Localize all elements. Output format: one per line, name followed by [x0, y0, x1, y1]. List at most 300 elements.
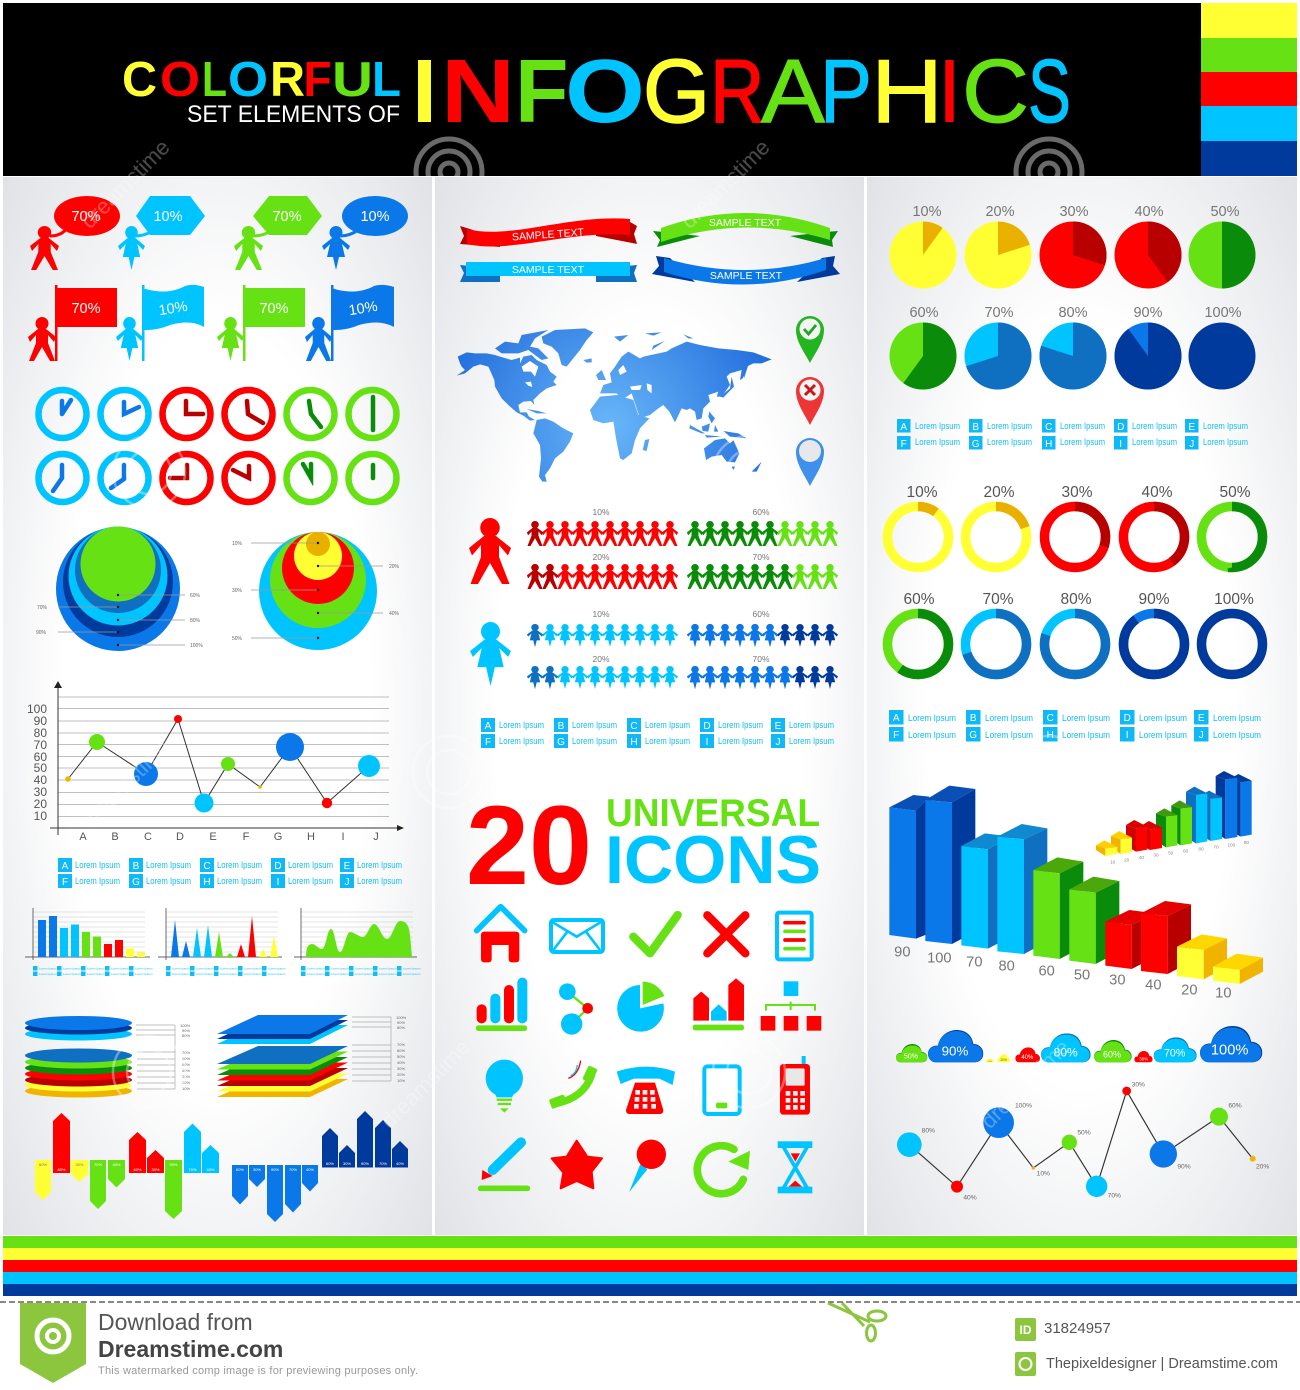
red speech bubble: 70% [71, 209, 101, 225]
heading: 20 universal icons: ICONS [605, 822, 821, 898]
scatter line chart: 10% [1037, 1171, 1050, 1178]
bubble line chart [27, 681, 404, 843]
pie percent labels: 90% [1133, 305, 1163, 321]
cloud 100% [1200, 1026, 1262, 1062]
bubble line chart: 20 [34, 797, 47, 811]
icon: cross [707, 915, 745, 953]
blue flag [331, 285, 394, 361]
arrow chart: multicolour: 90% [169, 1162, 178, 1167]
cloud 30% [1134, 1051, 1153, 1062]
small 3D bar chart: 70 [1213, 844, 1219, 849]
cloud 60%: 60% [1103, 1049, 1121, 1059]
arrow chart: multicolour [35, 1113, 219, 1219]
stacked discs chart: 50% [182, 1062, 190, 1067]
people percentage rows [469, 507, 838, 689]
percent labels: 60% [752, 507, 770, 517]
title: colorful: U [332, 53, 373, 107]
bubble line chart: E [209, 831, 217, 843]
footer: image id: ID [1020, 1323, 1032, 1337]
arrow chart: blue: 90% [361, 1161, 369, 1166]
large 3D bar chart [889, 786, 1263, 1002]
footer text: download: This watermarked comp image is for previewing purposes only. [98, 1365, 418, 1377]
legend: donuts: A [893, 713, 900, 724]
large 3D bar chart: 10 [1215, 986, 1231, 1002]
small 3D bar chart: 80 [1198, 847, 1204, 852]
stacked discs chart: 20% [182, 1080, 190, 1085]
clock blue 1 [38, 390, 86, 438]
title: colorful: O [228, 53, 268, 107]
legend: donuts: F [893, 730, 899, 741]
cloud 50% [896, 1044, 927, 1062]
arrow chart: multicolour: 60% [39, 1162, 47, 1167]
dashed cut line [0, 1301, 1300, 1303]
donut charts [888, 484, 1262, 674]
large 3D bar chart: 100 [927, 950, 952, 966]
clock red 1 [162, 390, 210, 438]
arrow chart: multicolour: 60% [133, 1167, 142, 1172]
legend: people: F [485, 737, 491, 748]
arrow chart: blue: 40% [396, 1161, 404, 1166]
donut 10% [888, 506, 948, 568]
green men 70% [687, 564, 838, 589]
stacked discs chart: 60% [182, 1056, 190, 1061]
icon: share [559, 983, 593, 1035]
icon: envelope [551, 920, 603, 952]
legend: line chart: Lorem Ipsum [146, 860, 191, 871]
legend: pies: E [1188, 422, 1195, 433]
pie percent labels: 70% [984, 305, 1014, 321]
title: colorful [122, 53, 401, 107]
large 3D bar chart: 30 [1109, 972, 1125, 988]
3D charts, clouds and scatter [889, 771, 1269, 1201]
legend: line chart: Lorem Ipsum [288, 876, 333, 887]
title: infographics: S [1028, 42, 1071, 142]
figure red man [30, 226, 59, 270]
arrow chart: multicolour: 30% [151, 1167, 160, 1172]
red flag: 70% [71, 301, 101, 317]
concentric circles chart: warm: 50% [232, 636, 243, 642]
stock watermark: dreamstime [376, 1035, 475, 1134]
cyan women 10% [527, 624, 678, 647]
arrow chart: blue: 90% [271, 1167, 279, 1172]
icon: pencil [481, 1142, 527, 1188]
legend: donuts: J [1199, 730, 1204, 741]
cyan speech bubble: 10% [153, 209, 183, 225]
stacked layers chart: 60% [397, 1048, 405, 1053]
figure blue man with flag [305, 317, 332, 361]
cloud 20% yellow [997, 1054, 1010, 1062]
legend: donuts: H [1047, 730, 1054, 741]
title: colorful: R [270, 53, 305, 107]
pie percent labels: 60% [909, 305, 939, 321]
legend: donuts: C [1047, 713, 1054, 724]
small 3D bar chart [1096, 771, 1252, 864]
donut percent labels: 70% [982, 591, 1014, 608]
legend: people: Lorem Ipsum [789, 736, 834, 747]
figure green woman with flag [217, 317, 244, 361]
legend: donuts [889, 710, 1261, 742]
pie 100% [1188, 322, 1256, 390]
stacked discs chart: 70% [182, 1050, 190, 1055]
red flag [55, 285, 117, 361]
title: infographics: G [643, 42, 710, 142]
legend: people: E [775, 721, 782, 732]
title: infographics: O [565, 42, 645, 142]
clock red 2 [224, 390, 272, 438]
concentric circles chart: blue: 90% [36, 630, 47, 636]
scatter line chart: 70% [1108, 1192, 1121, 1199]
legend: line chart: Lorem Ipsum [75, 876, 120, 887]
legend: people: Lorem Ipsum [789, 720, 834, 731]
concentric circles chart: blue: 80% [190, 618, 201, 624]
small 3D bar chart: 20 [1124, 858, 1130, 863]
panel: middle background [435, 177, 864, 1235]
large 3D bar chart: 90 [894, 945, 910, 961]
legend: pies: G [972, 439, 980, 450]
pin: check green [796, 316, 824, 363]
small 3D bar chart: 90 [1244, 840, 1249, 845]
legend: donuts: Lorem Ipsum [985, 713, 1033, 724]
panel: left background [3, 177, 432, 1235]
legend: pies: C [1045, 422, 1052, 433]
cloud 40% [1015, 1047, 1040, 1062]
stacked layers chart [217, 1015, 407, 1097]
arrow chart: blue [232, 1111, 408, 1222]
arrow chart: blue: 60% [326, 1161, 334, 1166]
green flag [243, 285, 305, 361]
legend: donuts: B [970, 713, 977, 724]
bubble line chart: 10 [34, 809, 47, 823]
stacked discs chart: 30% [182, 1074, 190, 1079]
stacked layers chart: 20% [397, 1072, 405, 1077]
arrow chart: multicolour: 70% [188, 1167, 197, 1172]
clock blue 2 [100, 390, 148, 438]
icon: refresh [697, 1146, 750, 1194]
pie charts [890, 204, 1256, 390]
legend: line chart: Lorem Ipsum [146, 876, 191, 887]
pie 90% [1114, 322, 1182, 390]
donut 50% [1202, 506, 1262, 568]
legend: pies: Lorem Ipsum [1060, 421, 1105, 432]
blue flag: 10% [348, 299, 379, 319]
speech bubbles with figures [30, 196, 408, 270]
legend: pies: Lorem Ipsum [915, 421, 960, 432]
donut percent labels: 20% [983, 484, 1015, 501]
small 3D bar chart: 10 [1110, 859, 1116, 864]
blue women 60% [687, 624, 838, 647]
donut 90% [1124, 614, 1184, 674]
percent labels: 20% [592, 654, 610, 664]
bubble line chart: 40 [34, 773, 47, 787]
footer: image id [1015, 1318, 1111, 1341]
pie 20% [964, 222, 1032, 288]
pie percent labels: 50% [1210, 204, 1240, 220]
large 3D bar chart: 60 [1039, 964, 1055, 980]
donut 80% [1044, 614, 1106, 674]
clock green 1 [286, 390, 334, 438]
icon: star [552, 1141, 602, 1188]
concentric circles chart: warm: 40% [389, 611, 400, 617]
bubble line chart: C [144, 831, 152, 843]
ribbon: green: SAMPLE TEXT [709, 217, 782, 229]
legend: pies [897, 419, 1248, 450]
legend: people: J [776, 737, 780, 748]
blue women 70% [687, 666, 838, 689]
scatter line chart: 40% [963, 1194, 977, 1201]
mini bar chart [25, 908, 153, 976]
title: colorful: F [304, 53, 332, 107]
ribbon: blue [652, 256, 840, 285]
stacked layers chart: 100% [396, 1015, 407, 1020]
percent labels: 70% [752, 654, 770, 664]
bubble line chart: D [176, 831, 184, 843]
legend: line chart: Lorem Ipsum [217, 860, 262, 871]
big red man [469, 518, 511, 584]
stacked discs chart: 40% [182, 1068, 190, 1073]
legend: line chart: I [277, 877, 279, 888]
icon: check [633, 915, 678, 953]
pie percent labels: 80% [1058, 305, 1088, 321]
donut 30% [1044, 506, 1106, 568]
legend: people: Lorem Ipsum [645, 736, 690, 747]
scatter line chart: 90% [1177, 1163, 1191, 1170]
small 3D bar chart: 100 [1227, 842, 1236, 847]
percent labels: 70% [752, 552, 770, 562]
stacked layers chart: 80% [397, 1025, 405, 1030]
stacked layers chart: 50% [397, 1054, 405, 1059]
donut percent labels [903, 484, 1254, 608]
bubble line chart: G [274, 831, 282, 843]
green speech bubble: 70% [272, 209, 302, 225]
legend: pies: Lorem Ipsum [1060, 437, 1105, 448]
colour swatches [1201, 3, 1297, 176]
donut 70% [966, 614, 1026, 674]
concentric circles chart: warm: 30% [232, 588, 243, 594]
legend: donuts: Lorem Ipsum [1213, 730, 1261, 741]
legend: line chart: Lorem Ipsum [288, 860, 333, 871]
legend: people: I [706, 737, 708, 748]
red men 10% [527, 521, 678, 546]
figure cyan woman with flag [116, 317, 143, 361]
legend: people: Lorem Ipsum [718, 720, 763, 731]
small 3D bar chart: 30 [1153, 853, 1159, 858]
cloud 60% [1094, 1040, 1132, 1062]
donut 40% [1124, 506, 1184, 568]
donut percent labels: 100% [1214, 591, 1254, 608]
percent labels: 10% [592, 507, 610, 517]
title: infographics: I [412, 42, 437, 142]
legend: line chart: Lorem Ipsum [357, 860, 402, 871]
figure green man [234, 226, 263, 270]
legend: pies: Lorem Ipsum [987, 437, 1032, 448]
green speech bubble [252, 196, 322, 236]
cyan flag: 10% [158, 299, 189, 319]
legend: pies: H [1045, 439, 1052, 450]
stacked layers chart: 90% [397, 1020, 405, 1025]
arrow chart: multicolour: 80% [57, 1167, 66, 1172]
pie percent labels: 20% [985, 204, 1015, 220]
legend: pies: Lorem Ipsum [1203, 437, 1248, 448]
clouds row [896, 1026, 1262, 1063]
legend: pies: J [1189, 439, 1194, 450]
cloud 90% [928, 1030, 983, 1062]
small 3D bar chart: 50 [1168, 851, 1174, 856]
title: infographics: C [962, 42, 1029, 142]
bubble line chart: H [307, 831, 315, 843]
donut percent labels: 30% [1061, 484, 1093, 501]
flags with figures [28, 285, 394, 361]
legend: line chart: D [274, 861, 282, 872]
world map [457, 328, 772, 482]
title: colorful: L [372, 53, 401, 107]
arrow chart: blue: 30% [343, 1161, 351, 1166]
heading: 20 universal icons: 20 [466, 783, 592, 908]
map: americas [457, 328, 593, 482]
icon: pie [617, 982, 664, 1032]
legend: line chart: C [203, 861, 211, 872]
cloud 10% yellow: 10% [988, 1061, 992, 1063]
icon: push pin [629, 1140, 666, 1192]
title [122, 42, 1071, 142]
red men 20% [527, 564, 678, 589]
stock watermark [76, 135, 1085, 1134]
stock watermark: dreamstime [76, 735, 175, 834]
large 3D bar chart: 80 [999, 958, 1015, 974]
bottom colour stripes [3, 1236, 1297, 1296]
legend: pies: Lorem Ipsum [1132, 421, 1177, 432]
legend: line chart: H [203, 877, 211, 888]
donut percent labels: 40% [1141, 484, 1173, 501]
legend: donuts: Lorem Ipsum [1139, 713, 1187, 724]
small 3D bar chart: 40 [1139, 855, 1144, 860]
large 3D bar chart: 40 [1145, 977, 1161, 993]
icon: arrow chart [693, 978, 744, 1030]
scatter line chart: 20% [1256, 1163, 1269, 1170]
panel: middle column content [457, 213, 840, 1194]
legend: people: A [485, 721, 492, 732]
large 3D bar chart: 70 [966, 955, 982, 971]
icon: scissors [828, 1303, 886, 1341]
pie percent labels: 100% [1204, 305, 1242, 321]
concentric circles chart: blue: 60% [190, 593, 201, 599]
legend: donuts: D [1124, 713, 1131, 724]
scatter line chart: 50% [1077, 1130, 1091, 1137]
cloud 70% [1154, 1037, 1197, 1062]
stacked layers chart: 30% [397, 1066, 405, 1071]
bubble line chart: 60 [34, 750, 47, 764]
arrow chart: multicolour: 40% [112, 1162, 121, 1167]
legend: people: D [703, 721, 711, 732]
bubble line chart: B [111, 831, 119, 843]
bubble line chart: J [373, 831, 379, 843]
concentric circles chart: warm: 20% [389, 564, 400, 570]
legend: line chart: Lorem Ipsum [75, 860, 120, 871]
ribbon: cyan [460, 262, 637, 282]
icon: home [477, 907, 525, 962]
stacked layers chart: 70% [397, 1042, 405, 1047]
legend: donuts: Lorem Ipsum [1213, 713, 1261, 724]
panel: right column content [888, 204, 1269, 1201]
stacked layers chart: 40% [397, 1060, 405, 1065]
legend: pies: D [1117, 422, 1124, 433]
large 3D bar chart: 20 [1181, 982, 1197, 998]
legend: line chart: F [62, 877, 68, 888]
clock icons [38, 390, 396, 502]
stacked discs chart: 90% [182, 1028, 190, 1033]
donut percent labels: 60% [903, 591, 935, 608]
donut 60% [888, 614, 948, 674]
pie 80% [1039, 322, 1106, 390]
donut percent labels: 90% [1138, 591, 1170, 608]
icon: document [777, 913, 812, 959]
legend: line chart: Lorem Ipsum [217, 876, 262, 887]
badge: dreamstime ribbon [20, 1303, 86, 1383]
icon grid [476, 907, 821, 1194]
title: infographics [412, 42, 1071, 142]
legend: pies: B [972, 422, 979, 433]
legend: pies: A [900, 422, 907, 433]
pie 40% [1114, 222, 1182, 288]
ribbon: green [653, 213, 838, 247]
icon: bar chart [476, 978, 527, 1031]
stock watermark: dreamstime [976, 1035, 1075, 1134]
footer: author: Thepixeldesigner | Dreamstime.com [1046, 1356, 1278, 1372]
title: infographics: F [515, 42, 568, 142]
bubble line chart: 90 [34, 714, 47, 728]
cyan flag [142, 285, 204, 361]
panel: left column content [25, 196, 421, 1222]
icon: telephone [617, 1067, 675, 1114]
legend: people: Lorem Ipsum [718, 736, 763, 747]
pie percent labels: 40% [1134, 204, 1164, 220]
icon: org chart [761, 981, 821, 1031]
legend: pies: Lorem Ipsum [987, 421, 1032, 432]
icon: handset [549, 1061, 598, 1109]
concentric circles chart: blue [36, 526, 203, 651]
legend: people: H [630, 737, 638, 748]
legend: pies: I [1119, 439, 1122, 450]
percent labels [592, 507, 770, 664]
pie 50% [1188, 222, 1256, 288]
bubble line chart: F [243, 831, 250, 843]
green men 60% [687, 521, 838, 546]
clock blue 3 [38, 454, 86, 502]
legend: people: C [630, 721, 638, 732]
footer text: download: Download from [98, 1309, 253, 1335]
percent labels: 20% [592, 552, 610, 562]
donut percent labels: 50% [1219, 484, 1251, 501]
arrow chart: blue: 70% [289, 1167, 297, 1172]
clock green 4 [348, 454, 396, 502]
cloud 70%: 70% [1164, 1048, 1186, 1060]
donut 100% [1202, 614, 1262, 674]
ribbon: blue: SAMPLE TEXT [710, 270, 783, 282]
clock red 4 [224, 454, 272, 502]
large 3D bar chart: 50 [1074, 967, 1090, 983]
cloud 100%: 100% [1211, 1042, 1248, 1058]
legend: line chart: E [344, 861, 351, 872]
title: infographics: N [441, 42, 515, 142]
bubble line chart: 30 [34, 785, 47, 799]
ribbon: red: SAMPLE TEXT [512, 226, 585, 244]
map: eurasia, africa, oceania [590, 332, 772, 472]
panel: right background [867, 177, 1297, 1235]
arrow chart: blue: 70% [379, 1161, 387, 1166]
concentric circles chart: warm: 10% [232, 541, 243, 547]
footer text: download [98, 1309, 418, 1377]
map pins [796, 316, 824, 486]
mini spike chart [158, 908, 286, 976]
